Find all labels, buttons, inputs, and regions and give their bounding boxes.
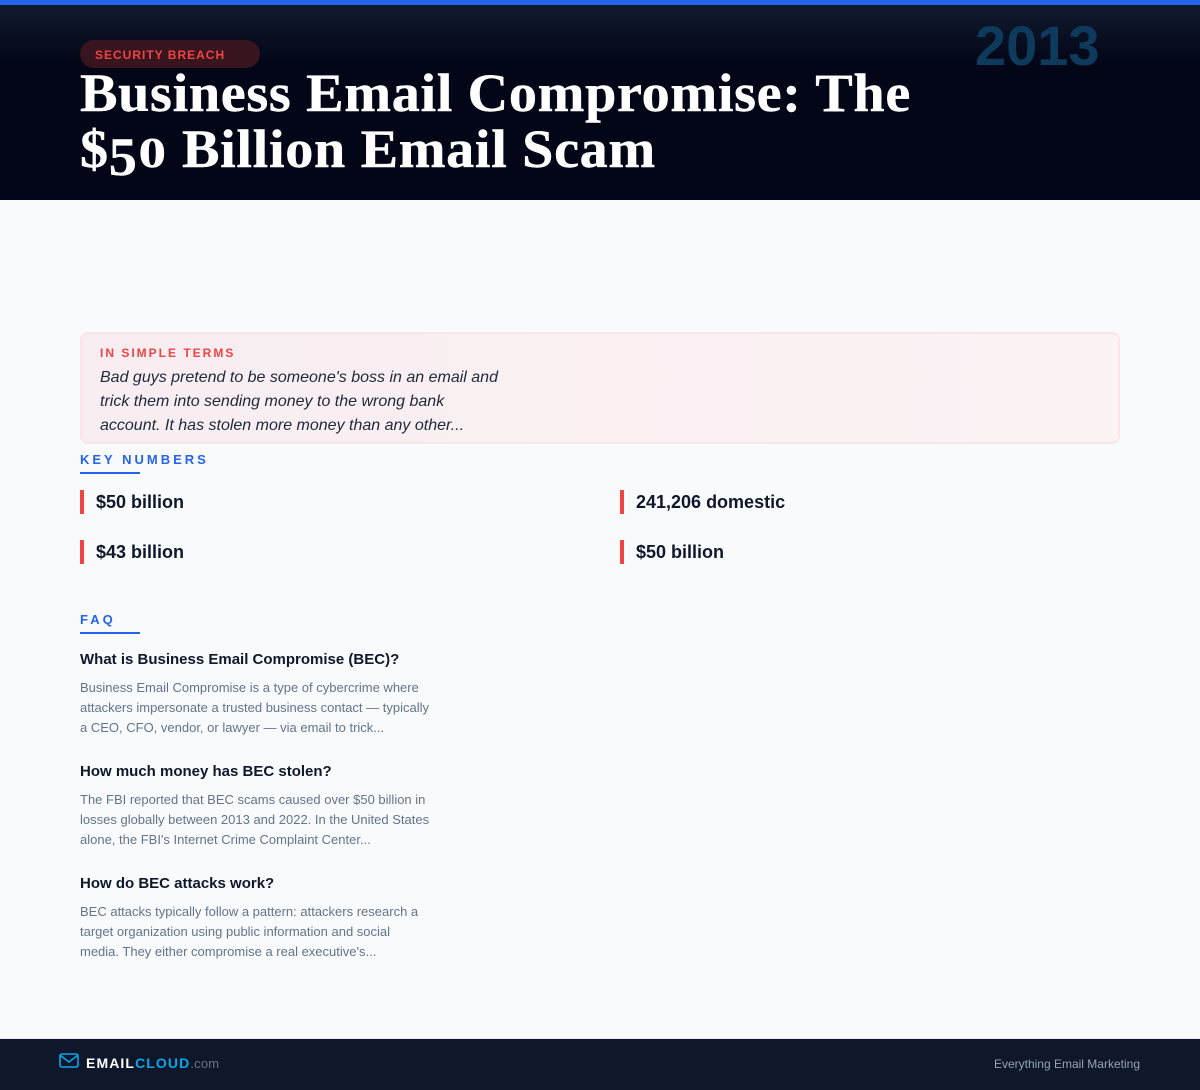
stat: $50 billion second: $50 billion (636, 542, 724, 562)
callout label: IN SIMPLE TERMS (100, 346, 235, 360)
tagline: Everything Email Marketing (994, 1057, 1140, 1071)
stat: 241,206 domestic: 241,206 domestic (636, 492, 785, 512)
heading: faq: FAQ (80, 612, 116, 627)
faq 3: media. They either compromise a real executive's... (80, 944, 376, 959)
faq 1: a CEO, CFO, vendor, or lawyer — via email to trick... (80, 720, 384, 735)
header band (0, 0, 1200, 200)
heading: key numbers: KEY NUMBERS (80, 452, 209, 467)
stat: $50 billion: $50 billion (96, 492, 184, 512)
logo wordmark: EMAILCLOUD.com (86, 1055, 219, 1071)
faq 2: The FBI reported that BEC scams caused over $50 billion in (80, 792, 425, 807)
callout text: account. It has stolen more money than any other... (100, 417, 464, 434)
faq 2 (80, 763, 429, 847)
title: Business Email Compromise: The (80, 63, 911, 123)
badge: security breach: SECURITY BREACH (95, 48, 225, 62)
faq 2: losses globally between 2013 and 2022. In the United States (80, 812, 429, 827)
callout text: Bad guys pretend to be someone's boss in an email and (100, 369, 498, 386)
title: $5 Billion Email Scam (80, 119, 656, 187)
footer (0, 1038, 1200, 1090)
faq 1: What is Business Email Compromise (BEC)? (80, 651, 399, 668)
faq 1: attackers impersonate a trusted business contact — typically (80, 700, 429, 715)
badge: security breach (80, 40, 260, 68)
callout text (100, 369, 498, 434)
faq 2: alone, the FBI's Internet Crime Complaint Center... (80, 832, 371, 847)
year: 2013 (975, 14, 1100, 77)
icon: envelope (59, 1053, 79, 1068)
faq 3: BEC attacks typically follow a pattern: attackers research a (80, 904, 418, 919)
faq 3 (80, 875, 418, 959)
faq 3: How do BEC attacks work? (80, 875, 274, 892)
callout text: trick them into sending money to the wrong bank (100, 393, 444, 410)
faq 3: target organization using public information and social (80, 924, 390, 939)
title (80, 63, 911, 187)
faq 1: Business Email Compromise is a type of cybercrime where (80, 680, 419, 695)
stat: $43 billion: $43 billion (96, 542, 184, 562)
panel: in simple terms (80, 332, 1120, 444)
faq 1 (80, 651, 429, 735)
title: 0 (138, 131, 166, 177)
faq 2: How much money has BEC stolen? (80, 763, 332, 780)
